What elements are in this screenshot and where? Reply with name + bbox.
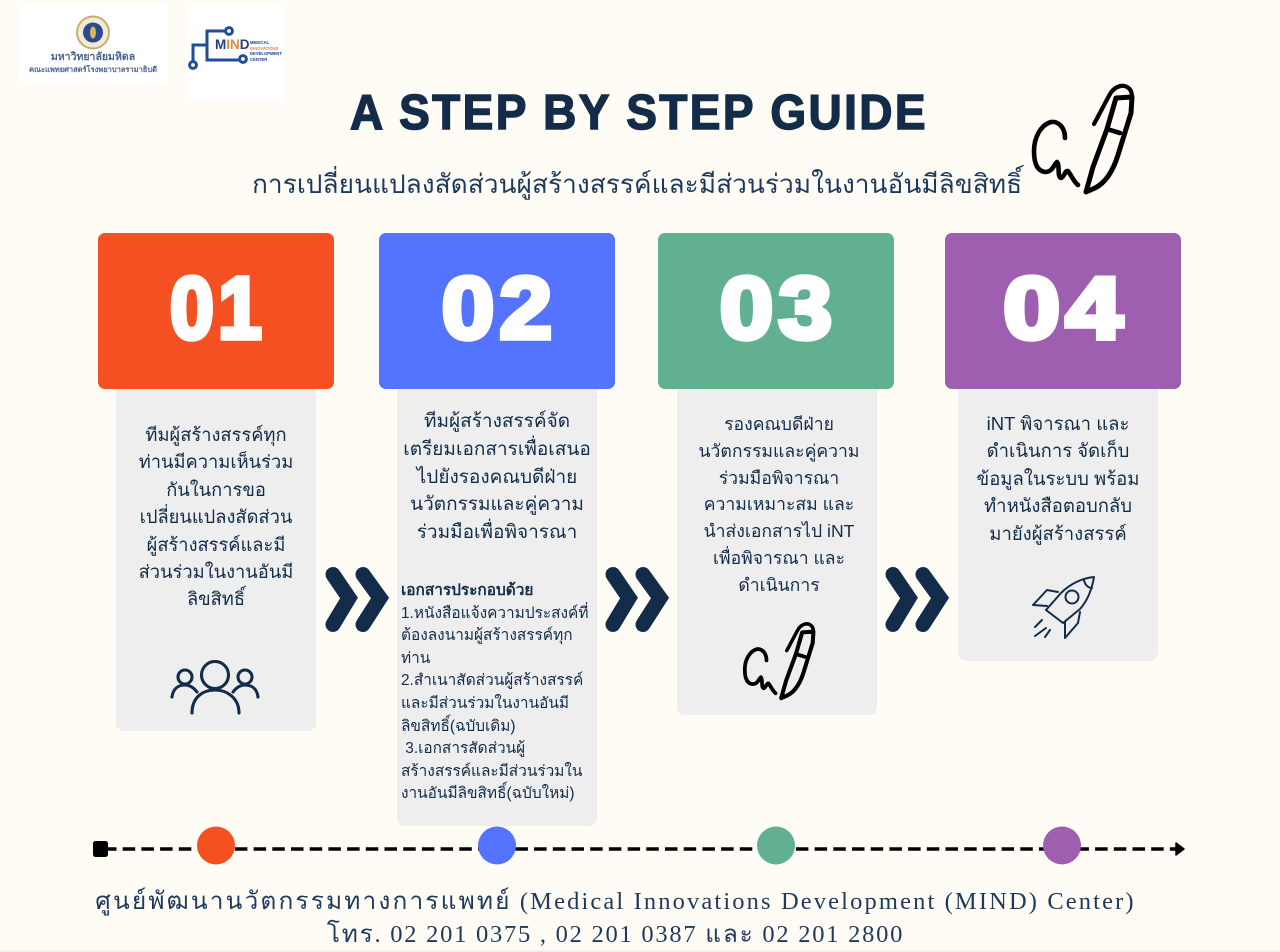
step 2 document list: สร้างสรรค์และมีส่วนร่วมใน [401, 763, 582, 780]
icon: people [170, 660, 260, 714]
step 3 number: 03 [720, 260, 837, 357]
step 1 text: ลิขสิทธิ์ [187, 588, 245, 609]
footer: center name: ศูนย์พัฒนานวัตกรรมทางการแพทย์ (Medical Innovations Development (MIND) Center) [95, 888, 1136, 915]
logo text [29, 51, 157, 74]
step 2 document list: 3.เอกสารสัดส่วนผู้ [405, 740, 525, 757]
step 2 text [403, 410, 591, 543]
arrow: chevrons 3 to 4 [886, 567, 949, 632]
step 1 text: ผู้สร้างสรรค์และมี [147, 534, 285, 555]
panel: step 1 [98, 233, 334, 731]
step 2 number: 02 [442, 260, 557, 357]
step 1 text: ทีมผู้สร้างสรรค์ทุก [145, 424, 287, 445]
step 2 text: ไปยังรองคณบดีฝ่าย [417, 467, 577, 488]
step 2 text: นวัตกรรมและคู่ความ [410, 494, 584, 515]
logo small text [250, 40, 282, 62]
step 2 document list: ต้องลงนามผู้สร้างสรรค์ทุก [401, 627, 573, 644]
step 1 text [139, 424, 293, 609]
icon: signature and pen [1032, 84, 1134, 194]
arrow: chevrons 1 to 2 [326, 567, 389, 632]
logo small text: DEVELOPMENT [250, 51, 282, 56]
subtitle: การเปลี่ยนแปลงสัดส่วนผู้สร้างสรรค์และมีส่วนร่วมในงานอันมีลิขสิทธิ์ [252, 169, 1022, 199]
step 3 text: ร่วมมือพิจารณา [719, 468, 839, 488]
step 2 document list: งานอันมีลิขสิทธิ์(ฉบับใหม่) [401, 785, 575, 802]
step 4 text: ข้อมูลในระบบ พร้อม [977, 468, 1139, 489]
step 2 document list: เอกสารประกอบด้วย [401, 582, 533, 599]
timeline arrowhead [1176, 843, 1184, 855]
step 2 body card [397, 383, 597, 826]
step 3 number [658, 233, 894, 389]
timeline [93, 826, 1185, 864]
icon: signature and pen [742, 622, 816, 700]
step 2 text: ร่วมมือเพื่อพิจารณา [417, 522, 577, 543]
panel: step 3 [658, 233, 894, 715]
step 3 text: นำส่งเอกสารไป iNT [704, 521, 854, 541]
step 2 number [379, 233, 615, 389]
logo small text: MEDICAL [250, 40, 269, 45]
step 3 text: ดำเนินการ [738, 575, 820, 595]
step 4 text: มายังผู้สร้างสรรค์ [989, 523, 1127, 544]
step 4 text: iNT พิจารณา และ [987, 413, 1129, 434]
logo text: คณะแพทยศาสตร์โรงพยาบาลรามาธิบดี [29, 65, 157, 74]
logo wordmark: MIND [215, 37, 250, 52]
step 2 text: ทีมผู้สร้างสรรค์จัด [424, 411, 570, 432]
step 1 text: เปลี่ยนแปลงสัดส่วน [140, 506, 292, 527]
logo: MIND center [187, 4, 284, 101]
step 1 number: 01 [170, 260, 266, 357]
step 4 text: ดำเนินการ จัดเก็บ [987, 440, 1129, 461]
panel: step 4 [945, 233, 1181, 661]
logo seal [76, 16, 110, 50]
step 4 number [945, 233, 1181, 389]
timeline dot 4 [1043, 826, 1081, 864]
step 4 text [977, 413, 1139, 545]
step 1 text: ท่านมีความเห็นร่วม [139, 451, 293, 472]
timeline dot 3 [757, 826, 795, 864]
timeline dot 2 [478, 826, 516, 864]
step 4 text: ทำหนังสือตอบกลับ [984, 495, 1132, 516]
arrow: chevrons 2 to 3 [606, 567, 669, 632]
step 1 text: กันในการขอ [166, 479, 266, 500]
step 1 body card [116, 383, 316, 731]
bottom edge strip [0, 950, 1280, 952]
step 3 text: ความเหมาะสม และ [704, 494, 854, 514]
step 2 document list: ท่าน [401, 650, 430, 667]
footer: phone numbers: โทร. 02 201 0375 , 02 201 0387 และ 02 201 2800 [327, 921, 904, 948]
step 3 text: รองคณบดีฝ่าย [724, 414, 834, 434]
icon: rocket [1032, 576, 1095, 639]
step 4 body card [958, 383, 1158, 661]
logo circuit [188, 26, 248, 70]
panel: step 2 [379, 233, 615, 826]
step 3 text [699, 414, 859, 595]
step 2 document list: 2.สำเนาสัดส่วนผู้สร้างสรรค์ [401, 672, 583, 689]
step 2 document list: และมีส่วนร่วมในงานอันมี [401, 695, 569, 712]
step 4 number: 04 [1003, 260, 1128, 357]
step 3 body card [677, 383, 877, 715]
logo: Mahidol University [19, 4, 167, 83]
timeline start marker [93, 841, 108, 857]
timeline dot 1 [197, 826, 235, 864]
step 2 document list [401, 582, 588, 802]
logo small text: INNOVATIONS [250, 46, 278, 51]
step 1 text: ส่วนร่วมในงานอันมี [139, 561, 293, 582]
title: A STEP BY STEP GUIDE [350, 84, 928, 140]
step 2 document list: ลิขสิทธิ์(ฉบับเดิม) [401, 718, 516, 735]
step 1 number [98, 233, 334, 389]
logo small text: CENTER [250, 57, 267, 62]
step 3 text: นวัตกรรมและคู่ความ [699, 441, 859, 461]
step 3 text: เพื่อพิจารณา และ [713, 548, 845, 568]
step 2 text: เตรียมเอกสารเพื่อเสนอ [403, 439, 591, 460]
logo text: มหาวิทยาลัยมหิดล [51, 51, 135, 63]
step 2 document list: 1.หนังสือแจ้งความประสงค์ที่ [401, 605, 588, 622]
